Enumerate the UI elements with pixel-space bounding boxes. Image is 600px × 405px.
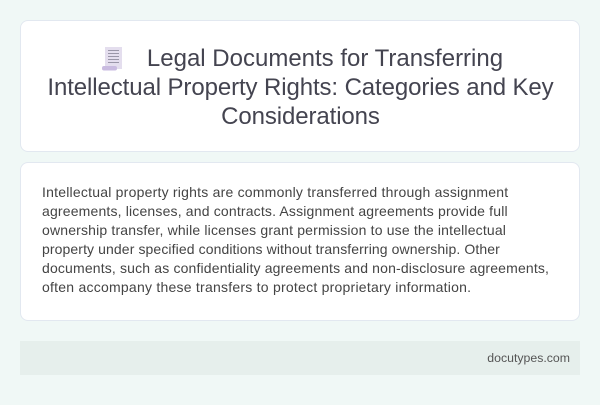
title line 2: Intellectual Property Rights: Categories and Key xyxy=(47,74,554,101)
description text: agreements, licenses, and contracts. Assignment agreements provide full xyxy=(42,203,508,219)
description text: Intellectual property rights are commonly transferred through assignment xyxy=(42,184,508,200)
description text: often accompany these transfers to protect proprietary information. xyxy=(42,279,471,295)
panel: title card xyxy=(20,20,580,152)
title line 1: Legal Documents for Transferring xyxy=(147,45,503,72)
footer bar xyxy=(20,341,580,375)
description text: ownership transfer, while licenses grant permission to use the intellectual xyxy=(42,222,506,238)
description text: documents, such as confidentiality agreements and non-disclosure agreements, xyxy=(42,260,549,276)
panel: description card xyxy=(20,162,580,321)
icon: document scroll xyxy=(102,47,122,70)
description text xyxy=(42,184,549,295)
description text: property under specified conditions without transferring ownership. Other xyxy=(42,241,500,257)
title line 3: Considerations xyxy=(221,103,380,130)
footer source label: docutypes.com xyxy=(487,351,570,365)
